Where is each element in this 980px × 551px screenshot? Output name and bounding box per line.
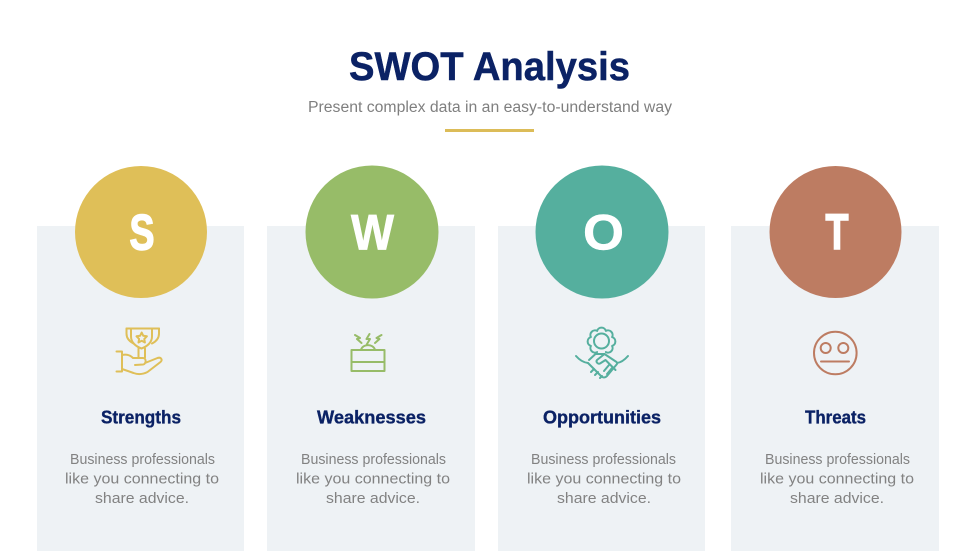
letter circle: T: T	[826, 204, 848, 260]
text: weaknesses description: like you connecting to	[296, 470, 450, 488]
heading: threats: Threats	[805, 408, 866, 428]
letter circle: T	[770, 166, 902, 298]
text: weaknesses description: share advice.	[326, 490, 420, 507]
icon: trophy in hand	[116, 328, 162, 374]
panel: opportunities	[498, 166, 705, 551]
text: threats description: like you connecting to	[760, 470, 914, 488]
heading: weaknesses: Weaknesses	[317, 408, 426, 428]
letter circle: W: W	[351, 204, 395, 260]
text: opportunities description: Business professionals	[531, 451, 676, 468]
text: opportunities description: share advice.	[557, 490, 651, 507]
letter circle: S: S	[130, 204, 154, 260]
text: strengths description	[65, 451, 219, 507]
text: opportunities description: like you connecting to	[527, 470, 681, 488]
text: threats description: share advice.	[790, 490, 884, 507]
icon: briefcase with bolts	[352, 334, 384, 371]
panel: weaknesses	[267, 166, 475, 551]
text: weaknesses description	[296, 451, 450, 507]
text: strengths description: like you connecting to	[65, 470, 219, 488]
subtitle: Present complex data in an easy-to-understand way	[308, 99, 672, 116]
text: opportunities description	[527, 451, 681, 507]
text: strengths description: Business professionals	[70, 451, 215, 468]
title underline	[445, 129, 534, 132]
heading: strengths: Strengths	[101, 408, 181, 428]
icon: neutral face	[814, 332, 857, 374]
text: threats description	[760, 451, 914, 507]
heading: opportunities: Opportunities	[543, 408, 661, 428]
panel: threats	[731, 166, 939, 551]
title: SWOT Analysis	[349, 45, 630, 89]
letter circle: O: O	[583, 204, 624, 260]
text: weaknesses description: Business professionals	[301, 451, 446, 468]
panel: strengths	[37, 166, 244, 551]
text: threats description: Business professionals	[765, 451, 910, 468]
letter circle: S	[75, 166, 207, 298]
letter circle: W	[306, 166, 438, 298]
text: strengths description: share advice.	[95, 490, 189, 507]
letter circle: O	[536, 166, 668, 298]
icon: gear and handshake	[576, 328, 628, 378]
